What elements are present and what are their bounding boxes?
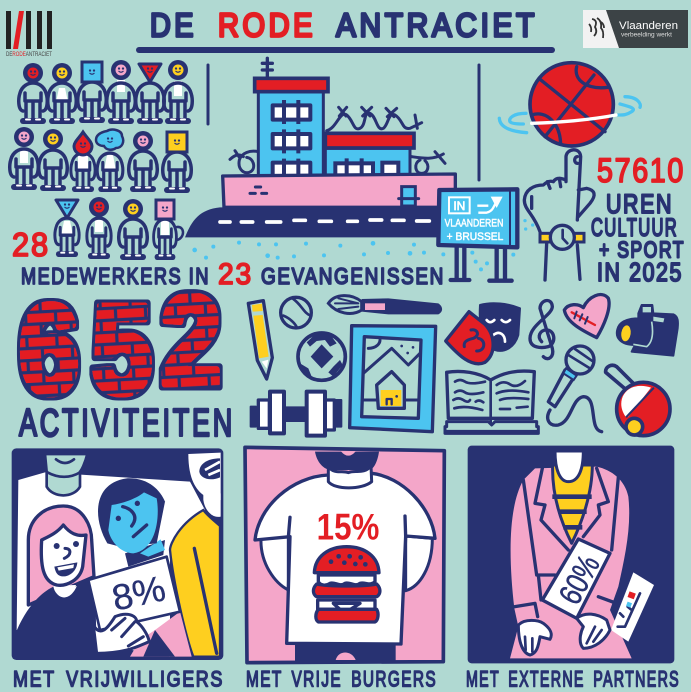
basketball on finger illustration <box>499 63 640 280</box>
hand <box>524 150 594 232</box>
low wing windows <box>335 158 398 177</box>
pink jacket <box>510 467 632 658</box>
stat: 57610 uren cultuur + sport in 2025: UREN <box>606 189 673 219</box>
neck <box>328 466 372 488</box>
head <box>555 451 583 482</box>
person 15 <box>119 199 147 257</box>
icon: table tennis paddle <box>606 365 670 436</box>
pink trousers <box>130 612 192 657</box>
swooshes <box>499 97 640 133</box>
road dashes <box>220 220 429 222</box>
stat: 28 medewerkers in 23 gevangenissen: 23 <box>218 258 253 291</box>
hand <box>93 614 149 653</box>
right hand <box>577 614 610 648</box>
person 5 <box>136 64 164 121</box>
stat: 28 medewerkers in 23 gevangenissen: GEVANGENISSEN <box>261 263 445 289</box>
person 9 <box>71 132 95 189</box>
striped shirt <box>553 465 592 543</box>
icon: tennis ball <box>281 297 311 328</box>
logo: Vlaanderen <box>583 10 688 48</box>
person 16 <box>154 200 183 257</box>
person 6 <box>164 60 192 121</box>
razor wire right <box>412 152 445 173</box>
burger <box>313 547 380 622</box>
logo: De Rode Antraciet: DERODEANTRACIET <box>6 52 52 58</box>
person 13 <box>55 200 79 254</box>
watch <box>540 225 584 280</box>
label: activiteiten: ACTIVITEITEN <box>19 402 235 445</box>
note 8% <box>88 557 180 630</box>
sign IN box <box>449 197 470 213</box>
icon: microphone <box>548 346 602 432</box>
logo: De Rode Antraciet <box>6 11 52 58</box>
title <box>139 6 552 50</box>
burger seeds <box>329 554 368 567</box>
icon: framed picture <box>350 326 436 432</box>
sign text: + BRUSSEL <box>447 231 503 243</box>
wall door <box>402 187 415 206</box>
note 8%: 8% <box>108 567 169 619</box>
prison building illustration <box>185 58 517 281</box>
graph note <box>611 572 654 642</box>
sign text: VLAANDEREN <box>445 218 503 230</box>
person 8 <box>39 129 67 188</box>
pink wall <box>223 174 455 207</box>
stat: 652 in brick numerals: 6 <box>19 279 79 420</box>
panel background <box>468 446 674 663</box>
ball seams <box>532 67 608 144</box>
person 12 <box>163 132 191 190</box>
trousers <box>295 644 396 661</box>
15%: 15% <box>317 505 379 547</box>
icon: camera <box>617 305 678 356</box>
title: ANTRACIET <box>336 6 538 44</box>
t-shirt <box>255 473 435 644</box>
chin <box>341 451 356 456</box>
activity icons left <box>248 297 345 436</box>
woman with pink hair <box>13 506 97 658</box>
person 14 <box>87 197 111 256</box>
stat: 28 medewerkers in 23 gevangenissen <box>12 226 445 291</box>
tower roof <box>255 78 328 92</box>
jacket lines <box>515 468 618 617</box>
road <box>185 207 443 237</box>
sign IN box: IN <box>453 199 465 213</box>
title: DE <box>150 6 197 44</box>
stat: 652 in brick numerals: 5 <box>92 279 152 420</box>
background head <box>45 454 87 495</box>
icon: paint brush <box>328 296 442 314</box>
panel: met vrijwilligers <box>12 448 223 660</box>
hair and beard <box>315 452 379 470</box>
sign posts <box>451 247 512 281</box>
icon: pencil <box>248 301 272 379</box>
low wing roof <box>325 133 414 148</box>
low wing <box>325 148 410 177</box>
blue dots <box>523 219 534 231</box>
sign arrow head <box>491 197 503 208</box>
sleeve lines <box>288 516 406 537</box>
caption: met vrijwilligers: MET VRIJWILLIGERS <box>13 666 224 692</box>
stat: 652 in brick numerals <box>19 270 221 420</box>
icon: open book <box>445 371 538 433</box>
sign <box>438 189 517 247</box>
wall bricks <box>250 187 267 193</box>
sign arrow <box>477 199 499 213</box>
icon: dumbbell <box>251 392 341 436</box>
yellow person <box>170 510 220 657</box>
shirt stripes <box>552 497 592 527</box>
panel: met externe partners <box>468 446 674 663</box>
stat: 28 medewerkers in 23 gevangenissen: 28 <box>12 226 50 263</box>
person 11 <box>129 131 157 189</box>
panel background <box>12 448 223 660</box>
icon: treble clef <box>530 300 554 359</box>
arms <box>261 536 432 591</box>
tower windows <box>273 100 310 177</box>
white stripe <box>532 115 616 123</box>
sign text <box>445 218 503 243</box>
blue dots <box>192 241 515 271</box>
basketball <box>530 63 613 146</box>
person 2 <box>48 63 76 121</box>
person 3 <box>78 62 106 120</box>
tower <box>258 92 323 177</box>
razor wire top <box>327 107 422 131</box>
icon: heart <box>564 295 609 338</box>
panel background <box>245 447 444 663</box>
activity icons right <box>328 295 678 436</box>
crowd of staff figures <box>10 60 192 257</box>
logo: Vlaanderen: Vlaanderen <box>619 20 678 32</box>
person 7 <box>10 127 38 187</box>
divider right <box>478 65 480 180</box>
panel: met vrije burgers <box>245 447 444 663</box>
person 10 <box>96 130 123 189</box>
stat: 57610 uren cultuur + sport in 2025 <box>591 152 685 287</box>
stat: 652 in brick numerals: 2 <box>161 270 221 411</box>
razor wire left <box>230 151 258 173</box>
left hand <box>518 620 551 655</box>
caption: met vrije burgers: MET VRIJE BURGERS <box>246 666 437 692</box>
divider left <box>206 65 210 124</box>
stat: 28 medewerkers in 23 gevangenissen: MEDEWERKERS IN <box>21 263 210 289</box>
icon: soccer ball <box>298 333 345 380</box>
note 60%: 60% <box>551 549 607 610</box>
blue person <box>98 478 165 567</box>
person 4 <box>107 60 135 121</box>
right head <box>188 453 221 517</box>
antenna <box>262 58 272 77</box>
title: RODE <box>218 6 316 44</box>
icon: theatre masks <box>446 303 520 364</box>
room wall <box>17 472 205 657</box>
logo: Vlaanderen: verbeelding werkt <box>621 32 672 38</box>
person 1 <box>19 63 47 121</box>
